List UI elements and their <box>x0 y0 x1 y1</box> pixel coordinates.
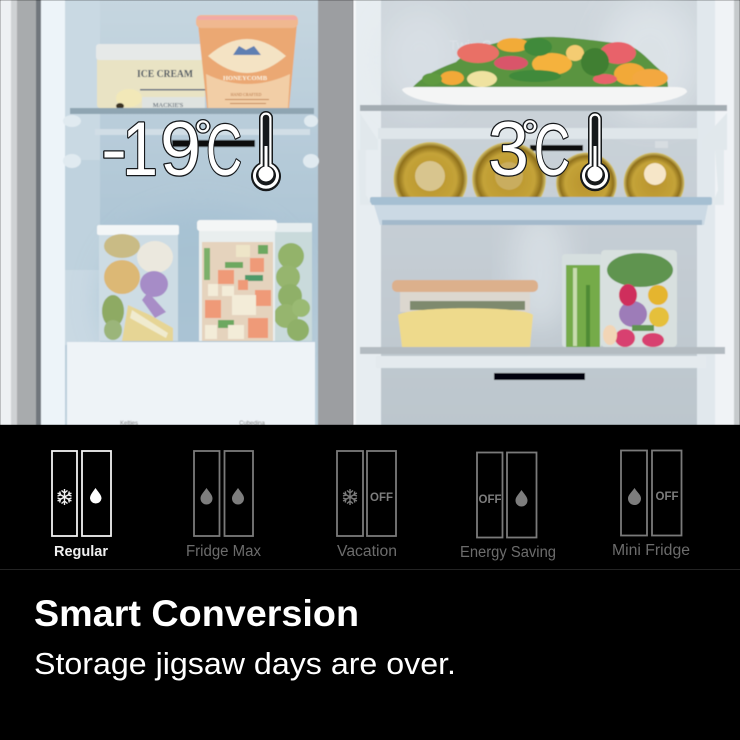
temperature label: 3°C fridge: ° <box>521 112 539 161</box>
mixed vegetables jar <box>197 220 277 341</box>
mode: Energy Saving: Energy Saving <box>460 544 556 561</box>
salad jar <box>601 250 677 347</box>
lower fridge shelf <box>360 347 725 380</box>
mode: Fridge Max: Fridge Max <box>186 543 261 560</box>
temperature label: 3°C fridge <box>488 107 570 192</box>
mode: Mini Fridge: Mini Fridge <box>612 542 690 559</box>
mode: Regular: Regular <box>54 543 108 560</box>
temperature label: -19°C freezer: 1 <box>122 107 158 192</box>
top fridge shelf <box>360 105 727 150</box>
honeycomb tub <box>196 15 298 108</box>
ice cream tub <box>96 44 206 109</box>
temperature label: -19°C freezer: ° <box>194 112 212 161</box>
white freezer drawer: Cubedina <box>239 421 266 427</box>
freezer shelf <box>63 108 319 168</box>
celery jar <box>562 254 602 347</box>
temperature label: 3°C fridge: C <box>534 111 570 191</box>
temperature label: -19°C freezer <box>101 107 242 192</box>
temperature label: -19°C freezer: 9 <box>160 107 201 192</box>
mode: Vacation <box>337 451 397 560</box>
icon: freezer thermometer <box>251 111 281 191</box>
salad on plate <box>413 37 668 87</box>
icon: fridge thermometer <box>580 112 610 191</box>
divider line <box>0 569 740 570</box>
panel: black text band <box>0 425 740 740</box>
white freezer drawer: Kelties <box>120 421 138 427</box>
mode: Mini Fridge: OFF <box>656 491 678 503</box>
panel: freezer compartment photo <box>0 0 353 427</box>
subtitle: Storage jigsaw days are over. <box>34 646 456 681</box>
ice cream tub: MACKIE'S <box>153 102 184 109</box>
bottles <box>393 141 685 198</box>
temperature label: 3°C fridge: 3 <box>488 107 529 192</box>
mode: Mini Fridge <box>612 450 690 559</box>
mode: Vacation: Vacation <box>337 543 397 560</box>
mode: Energy Saving: OFF <box>478 494 502 506</box>
white freezer drawer <box>67 342 315 427</box>
ice cream tub: ICE CREAM <box>137 69 194 80</box>
temperature label: -19°C freezer: - <box>101 107 127 192</box>
brussels sprout jar <box>274 223 312 341</box>
frozen vegetable jar <box>97 225 179 341</box>
panel: fridge compartment photo <box>353 0 740 425</box>
temperature label: -19°C freezer: C <box>206 111 242 191</box>
mode: Vacation: OFF <box>370 492 393 504</box>
title: Smart Conversion <box>34 593 359 634</box>
mode: Fridge Max <box>186 451 261 560</box>
white plate <box>402 87 687 105</box>
faded back-wall text: Twin Cooling <box>449 37 529 53</box>
wooden lid food bowl <box>392 280 538 347</box>
honeycomb tub: HAND CRAFTED <box>231 92 262 97</box>
honeycomb tub: HONEYCOMB <box>223 75 268 82</box>
mode: Regular <box>52 451 111 560</box>
mode: Energy Saving <box>460 452 556 561</box>
bottle tray <box>358 150 724 225</box>
